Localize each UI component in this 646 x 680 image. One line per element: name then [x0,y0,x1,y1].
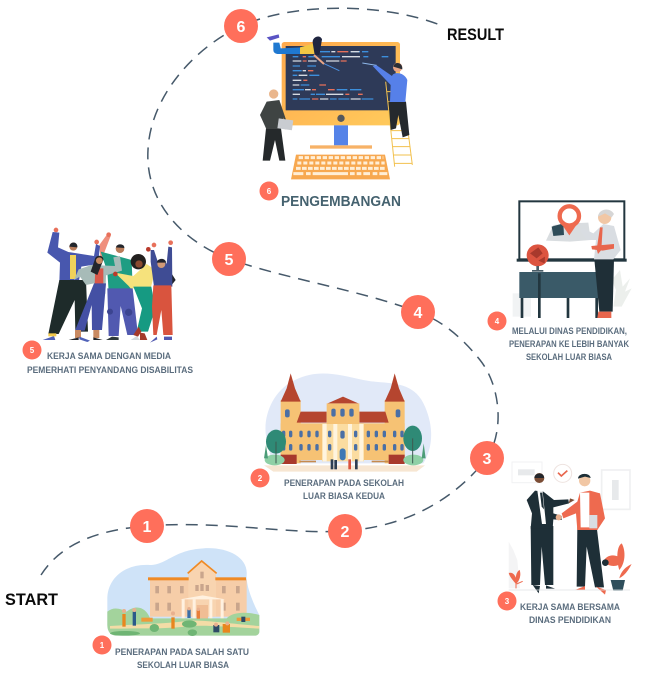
caption 4: SEKOLAH LUAR BIASA [526,352,612,363]
person three [101,252,133,292]
illustration: teacher with map [513,201,632,318]
illustration: handshake [509,462,632,595]
person two [74,256,122,294]
path marker 3 [470,441,504,475]
caption 5: PEMERHATI PENYANDANG DISABILITAS [27,365,193,376]
caption 5: KERJA SAMA DENGAN MEDIA [47,351,171,362]
caption 1: SEKOLAH LUAR BIASA [137,660,229,671]
illustration: campus building [107,548,259,636]
path marker 3: 3 [483,451,492,468]
path marker 4 [401,295,435,329]
panel: step 6 pengembangan [260,34,412,210]
label: start: START [5,591,58,609]
path marker 5 [212,242,246,276]
badge 1: 1 [100,641,105,650]
badge 2 [250,468,270,488]
panel: step 5 media [22,228,193,376]
person four [115,264,155,288]
panel: step 2 second school [250,373,431,502]
ladder [386,82,412,167]
badge 1 [92,636,112,654]
path marker 4: 4 [414,305,423,322]
illustration: grand school building [264,373,431,472]
caption 4 [509,326,629,363]
caption 3: DINAS PENDIDIKAN [529,615,611,626]
path marker 6: 6 [237,19,246,36]
caption 1: PENERAPAN PADA SALAH SATU [115,647,249,658]
path marker 2: 2 [341,524,350,541]
badge 5 [22,340,42,360]
illustration: cheering group [43,228,176,343]
panel: step 4 dinas [488,201,632,363]
badge 6: 6 [267,187,272,196]
panel: step 3 partnership [498,462,632,626]
badge 6 [260,182,278,200]
path marker 5: 5 [225,252,234,269]
person five [157,259,176,285]
person one [47,232,100,283]
dashed journey path [41,8,498,575]
path marker 1 [130,509,164,543]
badge 4: 4 [495,317,500,326]
caption 3: KERJA SAMA BERSAMA [520,602,620,613]
badge 2: 2 [258,474,263,483]
heading: pengembangan: PENGEMBANGAN [281,194,401,210]
caption 3 [520,602,620,626]
badge 3 [498,592,516,610]
badge 3: 3 [505,597,510,606]
label: result: RESULT [447,26,504,44]
panel: step 1 first school [92,548,259,671]
caption 2: LUAR BIASA KEDUA [303,491,385,502]
badge 4 [488,312,506,330]
caption 1 [115,647,249,671]
path marker 2 [328,514,362,548]
caption 5 [27,351,193,376]
caption 2: PENERAPAN PADA SEKOLAH [284,478,404,489]
path marker 1: 1 [143,519,152,536]
path marker 6 [224,9,258,43]
illustration: monitor and developers [260,34,412,179]
caption 2 [284,478,404,502]
badge 5: 5 [30,346,35,355]
